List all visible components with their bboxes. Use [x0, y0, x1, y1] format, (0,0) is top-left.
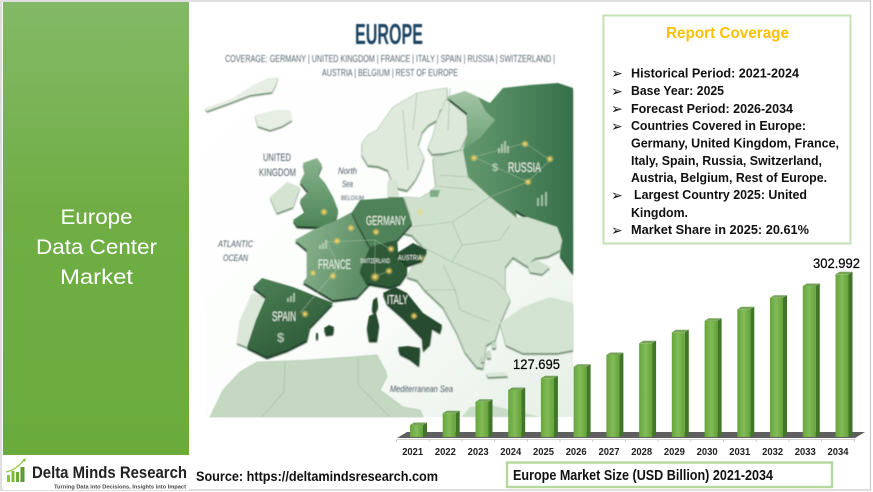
- year axis labels: 2025: [533, 447, 554, 458]
- year axis labels: 2029: [664, 447, 685, 458]
- Aegean islands: [481, 342, 496, 362]
- value label 2025: 127.695: [513, 357, 560, 372]
- glowing network nodes: [301, 140, 554, 320]
- map coverage subtitle: [225, 53, 555, 79]
- Greenland and Iceland: [205, 77, 292, 130]
- bullet arrows: ➢: [611, 84, 623, 100]
- sidebar title: Europe: [60, 205, 132, 229]
- icon: rising bars: [6, 458, 26, 482]
- bullet arrows: ➢: [611, 223, 623, 239]
- year axis labels: 2023: [468, 447, 489, 458]
- map labels: OCEAN: [223, 253, 248, 264]
- bullet arrows: [611, 66, 623, 239]
- report coverage list: [631, 66, 839, 237]
- country labels on dark land: FRANCE: [318, 256, 351, 272]
- Finland: [428, 97, 468, 154]
- report coverage list: Largest Country 2025: United: [634, 188, 807, 202]
- country labels on dark land: SPAIN: [272, 308, 296, 324]
- icon: dollar signs: $: [277, 330, 285, 345]
- Portugal: [237, 293, 266, 347]
- bullet arrows: ➢: [611, 119, 623, 135]
- sidebar title: Data Center: [36, 235, 157, 259]
- country borders: [403, 88, 510, 322]
- logo tagline: Turning Data into Decisions, Insights into Impact: [54, 484, 186, 490]
- country labels on dark land: RUSSIA: [508, 160, 541, 175]
- report coverage list: Germany, United Kingdom, France,: [631, 136, 839, 150]
- year axis labels: 2028: [631, 447, 653, 458]
- year axis labels: 2026: [566, 447, 587, 458]
- map labels: Mediterranean Sea: [390, 384, 453, 395]
- report coverage list: Base Year: 2025: [631, 84, 724, 98]
- bar 2032: [770, 295, 787, 437]
- icons: small bar charts: [287, 141, 547, 302]
- bar 2033: [803, 284, 820, 437]
- North Africa: [210, 355, 540, 417]
- year axis labels: [402, 447, 849, 458]
- Eastern Europe and Balkans: [400, 150, 562, 368]
- map labels: North: [338, 166, 357, 177]
- bar 2024: [508, 388, 525, 437]
- bar 2031: [737, 307, 754, 437]
- sidebar title: [36, 205, 157, 289]
- map labels: ATLANTIC: [217, 239, 253, 250]
- report coverage list: Forecast Period: 2026-2034: [631, 102, 793, 116]
- bar 2027: [606, 352, 623, 437]
- year axis labels: 2024: [500, 447, 522, 458]
- year axis labels: 2022: [435, 447, 456, 458]
- Ireland: [270, 182, 300, 213]
- Turkey: [486, 297, 573, 377]
- country labels on dark land: ITALY: [387, 292, 408, 307]
- year axis labels: 2032: [762, 447, 784, 458]
- report coverage list: Historical Period: 2021-2024: [631, 66, 799, 80]
- bar 2029: [672, 330, 689, 437]
- bar chart: market size 2021-2034: [396, 256, 865, 458]
- map coverage subtitle: AUSTRIA | BELGIUM | REST OF EUROPE: [322, 67, 458, 79]
- source line: Source: https://deltamindsresearch.com: [196, 468, 438, 484]
- United Kingdom: [293, 158, 338, 227]
- map labels: KINGDOM: [259, 167, 296, 179]
- France: [295, 212, 370, 300]
- map title: EUROPE: [355, 19, 423, 51]
- map of Europe: [205, 19, 573, 417]
- bullet arrows: ➢: [611, 102, 623, 118]
- map labels: UNITED: [263, 152, 291, 164]
- map labels: BELGIUM: [341, 195, 364, 202]
- bar 2028: [639, 341, 656, 437]
- map labels: Sea: [342, 179, 353, 190]
- logo name: Delta Minds Research: [32, 464, 187, 482]
- Spain: [247, 278, 333, 357]
- year axis labels: 2027: [598, 447, 620, 458]
- country labels on dark land: GERMANY: [366, 213, 406, 228]
- panel: report coverage: [604, 16, 850, 244]
- bar 2021: [410, 422, 427, 437]
- bar 2023: [476, 399, 492, 437]
- Denmark: [388, 180, 399, 197]
- chart caption box: Europe Market Size (USD Billion) 2021-2034: [513, 468, 773, 484]
- bar 2022: [443, 411, 460, 437]
- year axis labels: 2031: [729, 447, 751, 458]
- report coverage list: Countries Covered in Europe:: [631, 119, 806, 133]
- bar 2026: [574, 364, 591, 437]
- map background: [205, 80, 573, 417]
- Italy: [316, 287, 442, 365]
- network lines: [300, 143, 550, 313]
- report coverage list: Market Share in 2025: 20.61%: [631, 223, 809, 237]
- icon: dollar signs: [277, 162, 498, 345]
- year axis labels: 2030: [697, 447, 718, 458]
- map coverage subtitle: COVERAGE: GERMANY | UNITED KINGDOM | FRANCE | ITALY | SPAIN | RUSSIA | SWITZERLAND |: [225, 53, 555, 65]
- sidebar title: Market: [60, 265, 133, 289]
- country labels on dark land: [272, 160, 541, 324]
- Switzerland and Northern Italy: [360, 240, 407, 287]
- bullet arrows: ➢: [611, 188, 623, 204]
- logo: Delta Minds Research: [3, 455, 189, 490]
- chart floor: [397, 432, 865, 438]
- Russia: [447, 83, 573, 273]
- report coverage list: Italy, Spain, Russia, Switzerland,: [631, 154, 822, 168]
- report coverage heading: Report Coverage: [666, 25, 789, 42]
- year axis labels: 2033: [795, 447, 816, 458]
- report coverage list: Austria, Belgium, Rest of Europe.: [631, 171, 827, 185]
- bar 2025: [541, 376, 558, 437]
- bar 2034: [836, 272, 852, 437]
- bullet arrows: ➢: [611, 66, 623, 82]
- Austria: [397, 243, 427, 265]
- Norway and Sweden: [362, 88, 452, 190]
- country labels on dark land: AUSTRIA: [398, 255, 422, 262]
- Germany and Benelux: [352, 197, 412, 247]
- report coverage list: Kingdom.: [631, 206, 688, 220]
- value label 2034: 302.992: [813, 256, 860, 271]
- icon: dollar signs: $: [492, 162, 498, 174]
- bar 2030: [705, 318, 722, 437]
- year axis labels: 2021: [402, 447, 424, 458]
- chart caption box: [507, 462, 832, 487]
- map labels: [217, 152, 453, 395]
- panel: title sidebar: [3, 2, 189, 455]
- country labels on dark land: SWITZERLAND: [360, 259, 390, 265]
- year axis labels: 2034: [828, 447, 849, 458]
